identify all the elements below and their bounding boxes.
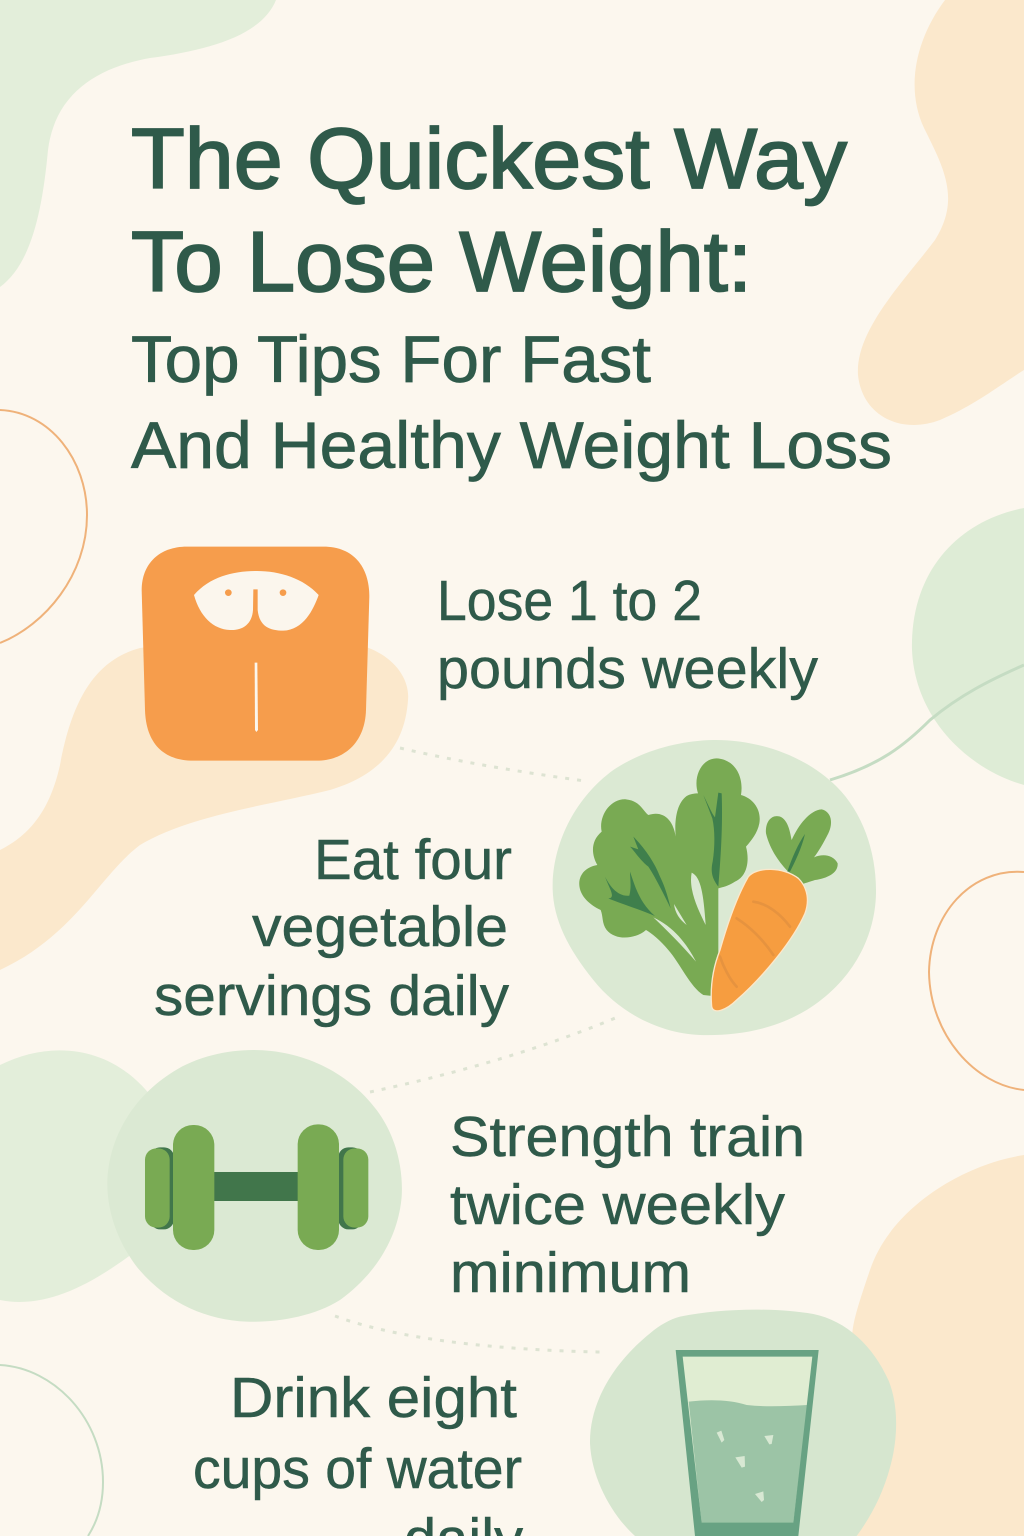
- tip 3 text: minimum: [450, 1241, 691, 1305]
- subtitle: [131, 322, 892, 482]
- tip 1 text: pounds weekly: [437, 637, 818, 701]
- icon background circle: [590, 1310, 896, 1536]
- tip 3 text: [450, 1105, 805, 1305]
- carrot: [711, 869, 807, 1011]
- subtitle: And Healthy Weight Loss: [131, 408, 892, 482]
- title: The Quickest Way: [131, 112, 848, 207]
- icon: vegetables with carrot: [553, 740, 876, 1035]
- right plates: [298, 1124, 368, 1250]
- tip 3 text: Strength train: [450, 1105, 805, 1169]
- tip 2 text: [154, 828, 512, 1028]
- ice bubbles: [717, 1431, 773, 1502]
- icon: glass of water: [590, 1310, 896, 1536]
- glass outline: [676, 1350, 819, 1536]
- icon background circle: [553, 740, 876, 1035]
- subtitle: Top Tips For Fast: [131, 322, 651, 396]
- glass fill: [683, 1357, 812, 1536]
- icon: orange bathroom scale: [142, 547, 369, 761]
- tip 4 text: [193, 1366, 524, 1536]
- water: [689, 1400, 807, 1523]
- left plates: [145, 1125, 214, 1250]
- tip 2 text: vegetable: [252, 895, 508, 959]
- tip 4 text: Drink eight: [230, 1366, 517, 1430]
- carrot top: [766, 809, 838, 884]
- greens: [579, 758, 760, 997]
- tip 1 text: Lose 1 to 2: [437, 569, 702, 633]
- icon background circle: [107, 1050, 402, 1322]
- tip 4 text: cups of water: [193, 1437, 522, 1501]
- tip 2 text: servings daily: [154, 964, 510, 1028]
- icon: dumbbell: [107, 1050, 402, 1322]
- tip 3 text: twice weekly: [450, 1173, 786, 1237]
- dumbbell bar: [213, 1172, 299, 1201]
- tip 1 text: [437, 569, 818, 701]
- title: To Lose Weight:: [131, 215, 752, 310]
- title: [131, 112, 848, 310]
- tip 2 text: Eat four: [314, 828, 512, 892]
